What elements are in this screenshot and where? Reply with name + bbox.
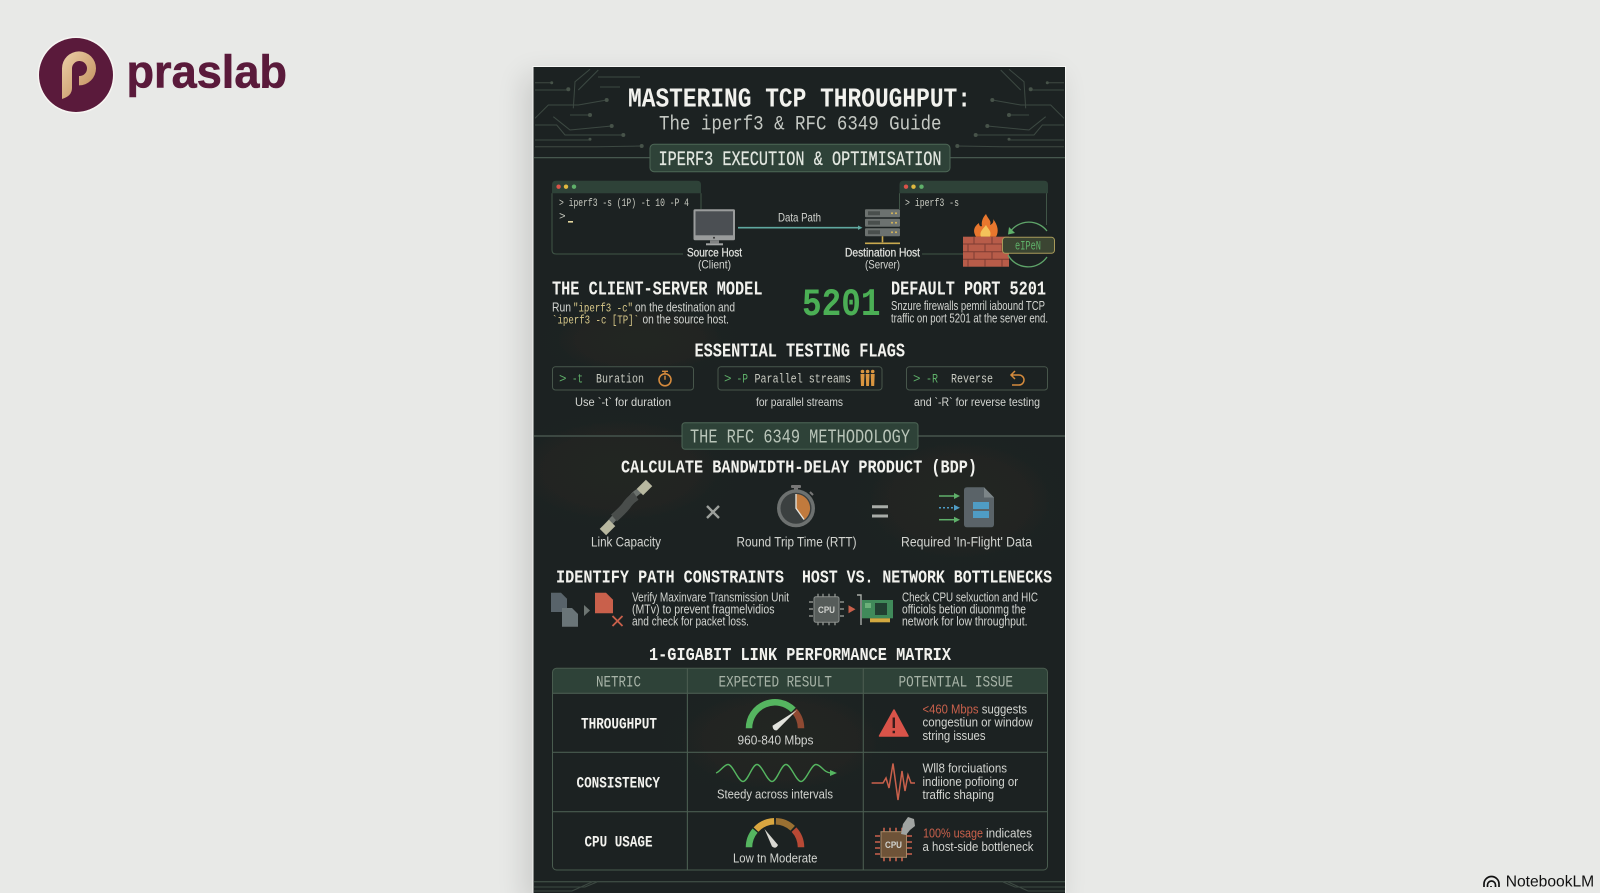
logo: praslab xyxy=(38,36,287,114)
block: identify path constraints: and check for packet loss. xyxy=(632,615,749,629)
section badge: iperf3 execution: IPERF3 EXECUTION & OPTIMISATION xyxy=(658,149,942,172)
row: cpu usage: 100% usage xyxy=(923,827,983,841)
symbol: multiply xyxy=(707,506,719,518)
icon: CPU to NIC xyxy=(809,594,893,625)
section: BDP formula xyxy=(591,458,1032,550)
block: host vs network bottlenecks: HOST VS. NETWORK BOTTLENECKS xyxy=(802,567,1052,588)
terminal: client: > iperf3 -s (1P) -t 10 -P 4 xyxy=(559,198,689,210)
circuit decoration top-right xyxy=(955,69,1064,148)
arrow: data path xyxy=(738,211,862,230)
table frame xyxy=(552,668,1048,870)
flag: reverse: -R xyxy=(926,372,938,386)
label: destination host: (Server) xyxy=(865,257,900,271)
terminal: client: > xyxy=(559,211,566,223)
row: throughput: 960-840 Mbps xyxy=(738,732,814,747)
label: source host: (Client) xyxy=(698,257,731,271)
flag: duration xyxy=(552,367,694,390)
icon: firewall xyxy=(963,214,1047,267)
block: host vs network bottlenecks: network for low throughput. xyxy=(902,615,1028,629)
block: identify path constraints: IDENTIFY PATH CONSTRAINTS xyxy=(556,567,784,588)
table header: POTENTIAL ISSUE xyxy=(898,674,1013,692)
section: essential testing flags: ESSENTIAL TESTING FLAGS xyxy=(694,341,905,363)
main title: MASTERING TCP THROUGHPUT: xyxy=(628,86,971,116)
icon: stopwatch xyxy=(777,485,815,527)
flag: reverse xyxy=(906,367,1048,390)
stat: port 5201: 5201 xyxy=(802,283,880,327)
block: client-server model: "iperf3 -c" xyxy=(573,302,633,316)
formula labels: Link Capacity xyxy=(591,535,661,550)
icon: fragmented packets xyxy=(551,593,622,627)
icon: overloaded cpu xyxy=(875,817,915,861)
section: performance matrix xyxy=(552,645,1048,870)
block: client-server model xyxy=(552,278,762,328)
row: throughput xyxy=(581,702,1034,747)
formula labels: Required 'In-Flight' Data xyxy=(901,535,1032,550)
row: consistency: traffic shaping xyxy=(922,788,994,802)
row: cpu usage xyxy=(584,817,1034,865)
block: client-server model: on the destination and xyxy=(635,301,735,315)
row: throughput: THROUGHPUT xyxy=(581,715,657,733)
table header xyxy=(596,674,1013,692)
infographic panel xyxy=(500,66,1070,893)
row: consistency: Steedy across intervals xyxy=(717,787,833,802)
flag: parallel streams: > xyxy=(724,372,732,386)
section badge: rfc 6349: THE RFC 6349 METHODOLOGY xyxy=(690,426,910,448)
flag: parallel streams xyxy=(718,367,882,390)
flag: parallel streams: -P xyxy=(736,372,748,386)
row: cpu usage: a host-side bottleneck xyxy=(922,840,1034,854)
badge: open port: eIPeN xyxy=(1015,238,1041,254)
panel shadow xyxy=(524,75,1060,893)
formula labels xyxy=(591,535,1032,550)
flag: parallel streams: Parallel streams xyxy=(754,372,851,386)
section badge: iperf3 execution xyxy=(534,144,1065,172)
section: performance matrix: 1-GIGABIT LINK PERFORMANCE MATRIX xyxy=(649,645,952,666)
table header: EXPECTED RESULT xyxy=(718,674,832,692)
icon: source monitor xyxy=(694,209,735,245)
flag descriptions: Use `-t` for duration xyxy=(575,395,671,409)
flag descriptions xyxy=(575,395,1040,409)
block: host vs network bottlenecks: Check CPU selxuction and HIC xyxy=(902,591,1038,605)
terminal: server: > iperf3 -s xyxy=(905,198,959,210)
gauge: throughput xyxy=(749,702,801,730)
icon: in-flight data xyxy=(939,487,994,527)
arrow: data path: Data Path xyxy=(778,211,821,225)
flag descriptions: and `-R` for reverse testing xyxy=(914,395,1040,409)
logo: praslab: praslab xyxy=(126,46,287,98)
main title xyxy=(628,86,971,136)
stat: port 5201: DEFAULT PORT 5201 xyxy=(891,278,1046,300)
block: client-server model: THE CLIENT-SERVER MODEL xyxy=(552,278,762,300)
main title: The iperf3 & RFC 6349 Guide xyxy=(659,113,942,136)
row: consistency: CONSISTENCY xyxy=(576,774,660,792)
icon: overloaded cpu: CPU xyxy=(885,840,902,851)
row: throughput: <460 Mbps xyxy=(922,702,978,716)
footer circuit decoration xyxy=(534,882,1065,891)
block: client-server model: Run xyxy=(552,301,571,315)
block: host vs network bottlenecks xyxy=(802,567,1052,629)
table header: NETRIC xyxy=(596,674,641,692)
flag descriptions: for parallel streams xyxy=(756,395,843,409)
badge: open port xyxy=(1002,237,1054,254)
symbol: equals xyxy=(872,507,888,516)
stat: port 5201: traffic on port 5201 at the server end. xyxy=(891,311,1048,325)
watermark: NotebookLM: NotebookLM xyxy=(1506,874,1594,890)
circuit decoration top-left xyxy=(535,69,644,148)
label: source host: Source Host xyxy=(687,246,743,260)
section: BDP formula: CALCULATE BANDWIDTH-DELAY PRODUCT (BDP) xyxy=(621,458,977,479)
block: identify path constraints: (MTv) to prevent fragmelvidios xyxy=(632,603,774,617)
icon: CPU to NIC: CPU xyxy=(818,605,835,616)
section: essential testing flags xyxy=(552,341,1048,409)
row: cpu usage: CPU USAGE xyxy=(584,834,652,852)
label: destination host xyxy=(845,246,921,271)
flag: duration: > xyxy=(559,372,567,386)
row: consistency: Wll8 forciuations xyxy=(922,761,1007,775)
row: throughput: suggests xyxy=(982,702,1027,716)
flag: duration: -t xyxy=(572,372,583,386)
row: cpu usage: indicates xyxy=(986,827,1032,841)
row: consistency xyxy=(576,761,1018,802)
row: consistency: indiione pofioing or xyxy=(922,775,1018,789)
terminal: client xyxy=(552,181,701,254)
flag: reverse: Reverse xyxy=(951,372,993,386)
row: throughput: string issues xyxy=(922,729,986,743)
block: client-server model: `iperf3 -c [TP]` xyxy=(552,314,639,328)
block: client-server model: on the source host. xyxy=(642,312,729,326)
block: identify path constraints: Verify Maxinvare Transmission Unit xyxy=(632,591,789,605)
stat: port 5201 xyxy=(802,278,1048,327)
diagram: client-server xyxy=(552,181,1054,271)
section badge: rfc 6349 xyxy=(534,423,1065,449)
label: source host xyxy=(687,246,743,271)
chart: steady wave xyxy=(716,764,837,782)
chart: erratic pulse xyxy=(872,764,915,800)
icon: warning xyxy=(880,710,908,736)
row: cpu usage: Low tn Moderate xyxy=(733,850,818,865)
icon: destination server xyxy=(865,209,900,243)
flag: duration: Buration xyxy=(596,372,644,386)
block: host vs network bottlenecks: officiols betion diuonmg the xyxy=(902,603,1026,617)
terminal: server xyxy=(900,181,1048,254)
icon: cable xyxy=(600,480,652,535)
label: destination host: Destination Host xyxy=(845,246,921,260)
block: identify path constraints xyxy=(551,567,789,629)
flag: reverse: > xyxy=(913,372,921,386)
row: throughput: congestiun or window xyxy=(922,716,1034,730)
gauge: cpu usage xyxy=(749,821,801,848)
formula labels: Round Trip Time (RTT) xyxy=(736,535,856,550)
stat: port 5201: Snzure firewalls pemril iabound TCP xyxy=(891,299,1045,313)
